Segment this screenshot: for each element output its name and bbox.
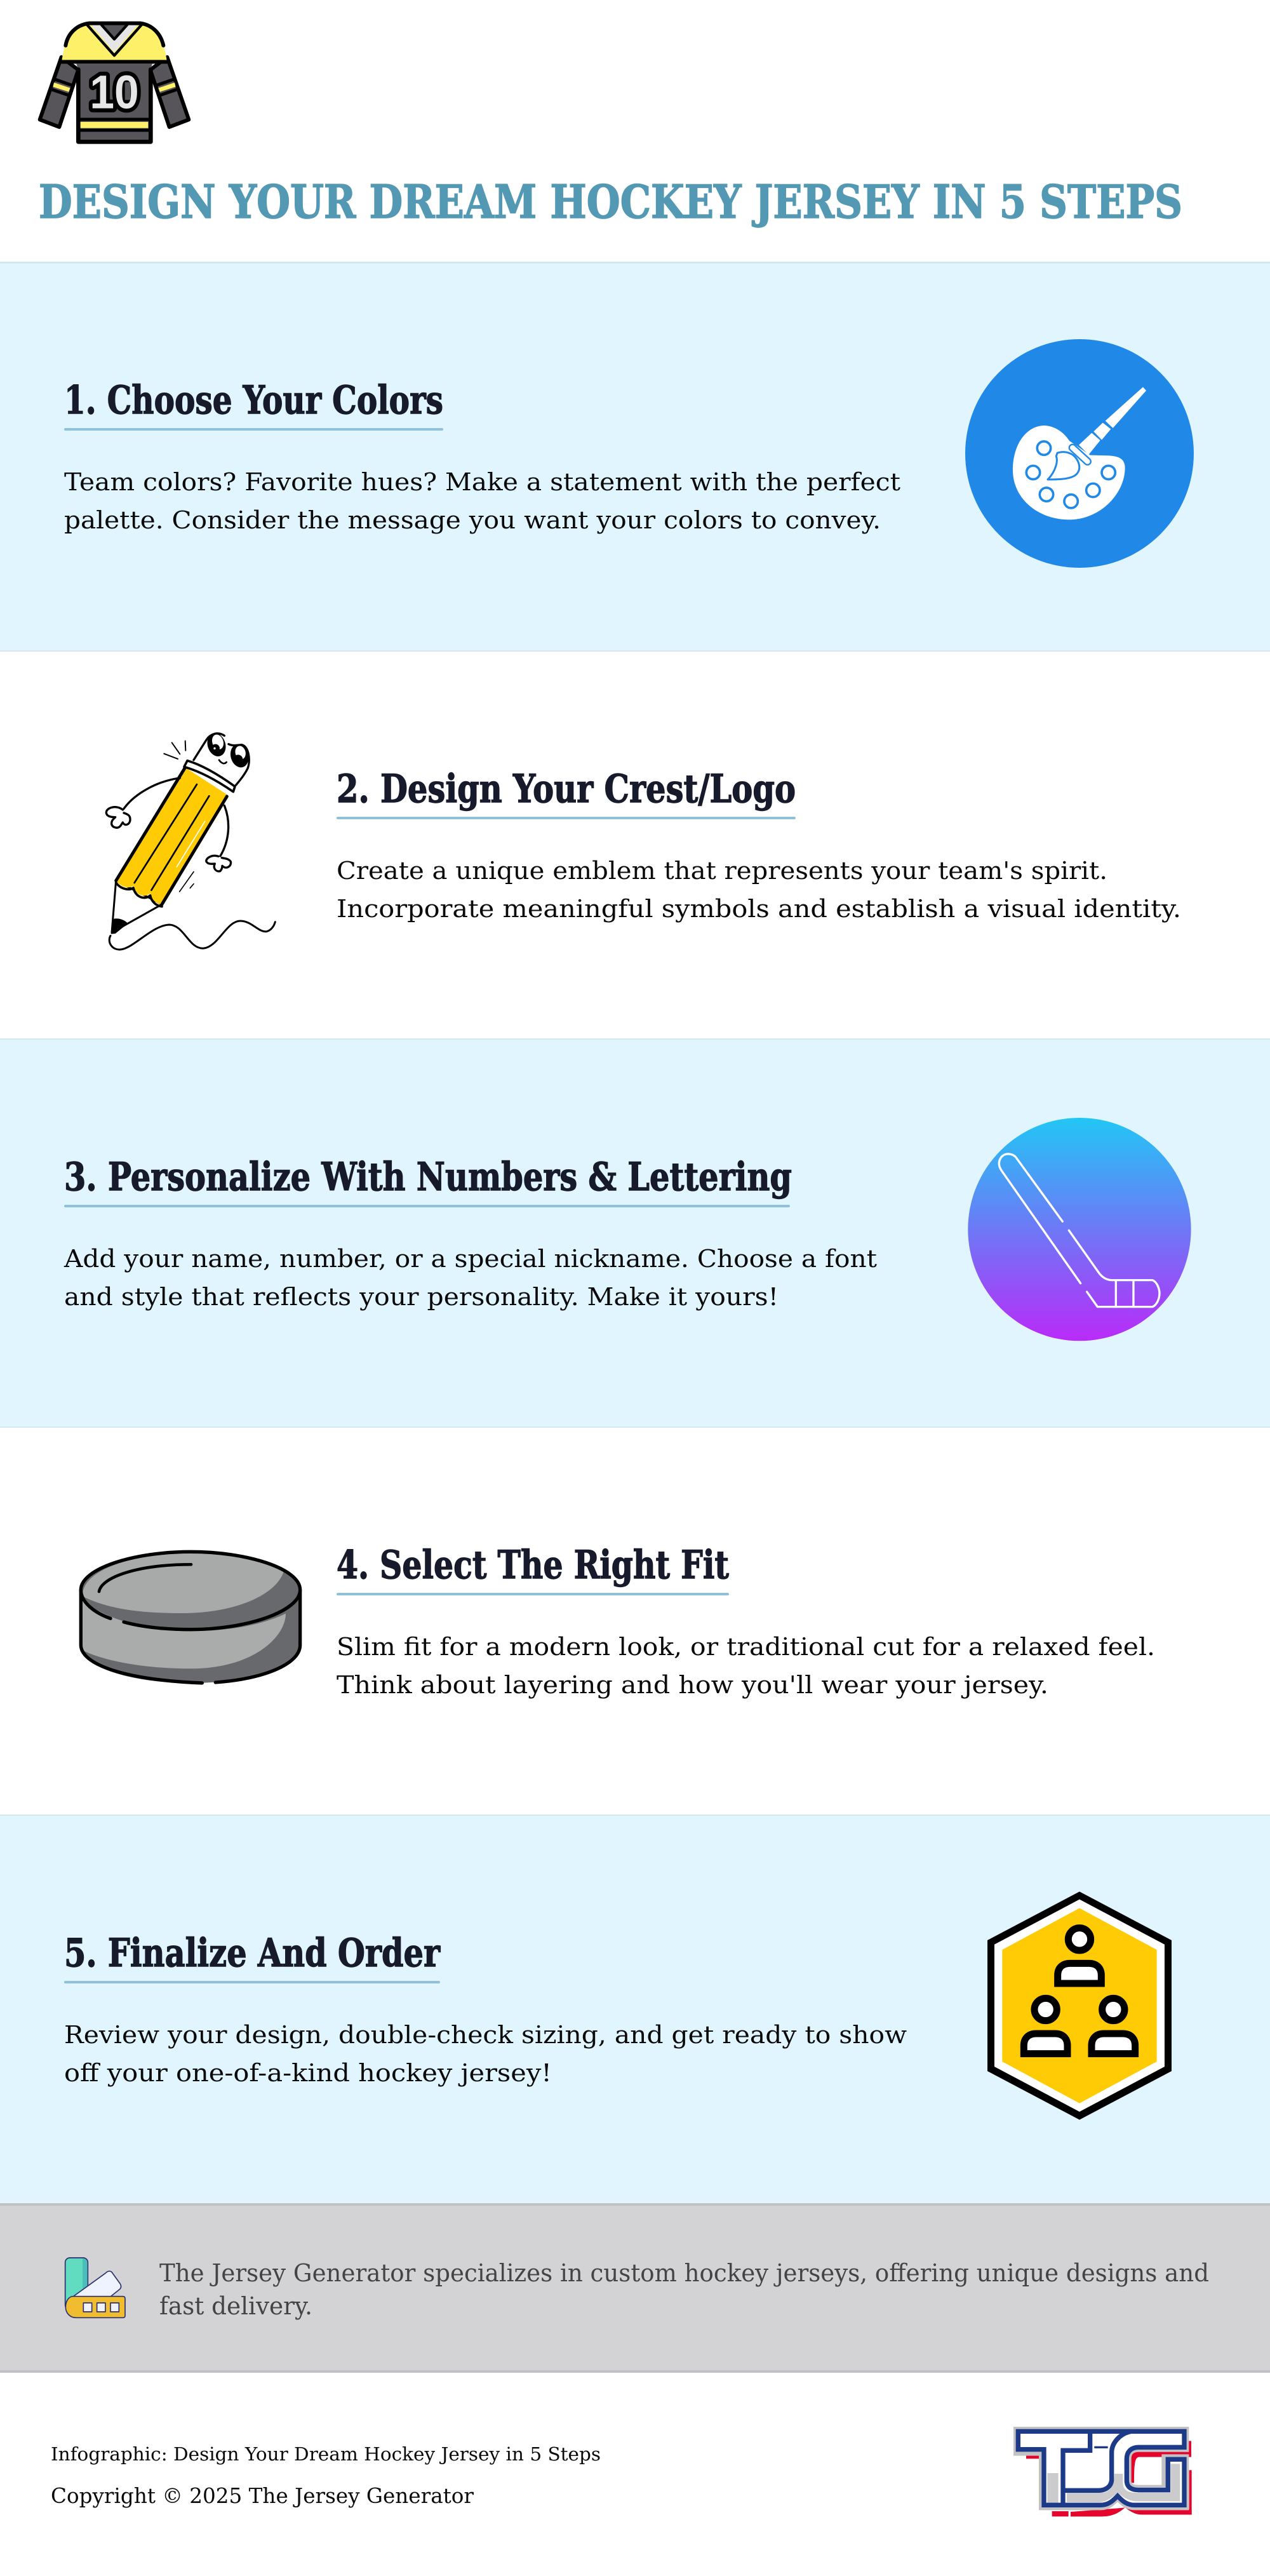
text: company note — [159, 2259, 1209, 2320]
text: step 5 body — [64, 2021, 907, 2087]
text: step 3 body — [64, 1245, 877, 1311]
icon: hockey puck — [81, 1552, 300, 1683]
panel: step 5 finalize and order — [0, 1815, 1270, 2203]
text: company note: fast delivery. — [159, 2292, 312, 2320]
panel: company note — [0, 2203, 1270, 2373]
header — [39, 23, 1182, 229]
icon: palette and brush — [965, 339, 1194, 568]
panel: step 1 choose your colors — [0, 262, 1270, 650]
text: step 4 body: Slim fit for a modern look, or traditional cut for a relaxed feel. — [337, 1633, 1155, 1661]
icon: pencil character — [106, 731, 275, 949]
text: step 4 body — [337, 1633, 1155, 1699]
footer — [51, 2429, 1192, 2516]
text: step 2 body — [337, 857, 1181, 923]
text: step 2 body: Create a unique emblem that represents your team's spirit. — [337, 857, 1107, 885]
text: step 1 body: Team colors? Favorite hues? Make a statement with the perfect — [64, 468, 900, 496]
text: footer credits: Infographic: Design Your Dream Hockey Jersey in 5 Steps — [51, 2443, 601, 2465]
heading: step 4: 4. Select The Right Fit — [337, 1543, 729, 1588]
text: company note: The Jersey Generator specializes in custom hockey jerseys, offering unique designs and — [159, 2259, 1209, 2287]
panel: step 3 personalize with numbers and lettering — [0, 1038, 1270, 1426]
text: step 5 body: off your one-of-a-kind hockey jersey! — [64, 2059, 552, 2087]
jersey number: 10 — [90, 66, 139, 119]
heading: step 5: 5. Finalize And Order — [64, 1931, 441, 1976]
text: step 5 body: Review your design, double-check sizing, and get ready to show — [64, 2021, 907, 2049]
text: footer credits — [51, 2443, 601, 2508]
text: step 4 body: Think about layering and how you'll wear your jersey. — [337, 1671, 1048, 1699]
heading: step 3: 3. Personalize With Numbers & Lettering — [64, 1155, 792, 1200]
text: step 3 body: Add your name, number, or a special nickname. Choose a font — [64, 1245, 877, 1273]
text: step 2 body: Incorporate meaningful symbols and establish a visual identity. — [337, 895, 1181, 923]
heading: step 2: 2. Design Your Crest/Logo — [337, 767, 796, 812]
logo: TJG — [1016, 2429, 1192, 2516]
icon: colour swatches — [65, 2258, 125, 2318]
heading: step 1: 1. Choose Your Colors — [64, 378, 443, 423]
icon: hockey jersey — [40, 23, 189, 142]
text: step 1 body: palette. Consider the message you want your colors to convey. — [64, 506, 881, 534]
text: footer credits: Copyright © 2025 The Jersey Generator — [51, 2483, 474, 2508]
icon: team hexagon badge — [987, 1891, 1172, 2120]
text: step 1 body — [64, 468, 900, 534]
panel: step 4 select the right fit — [0, 1426, 1270, 1815]
text: step 3 body: and style that reflects your personality. Make it yours! — [64, 1283, 779, 1311]
icon: hockey stick in gradient circle — [968, 1118, 1191, 1341]
panel: step 2 design your crest/logo — [0, 650, 1270, 1038]
